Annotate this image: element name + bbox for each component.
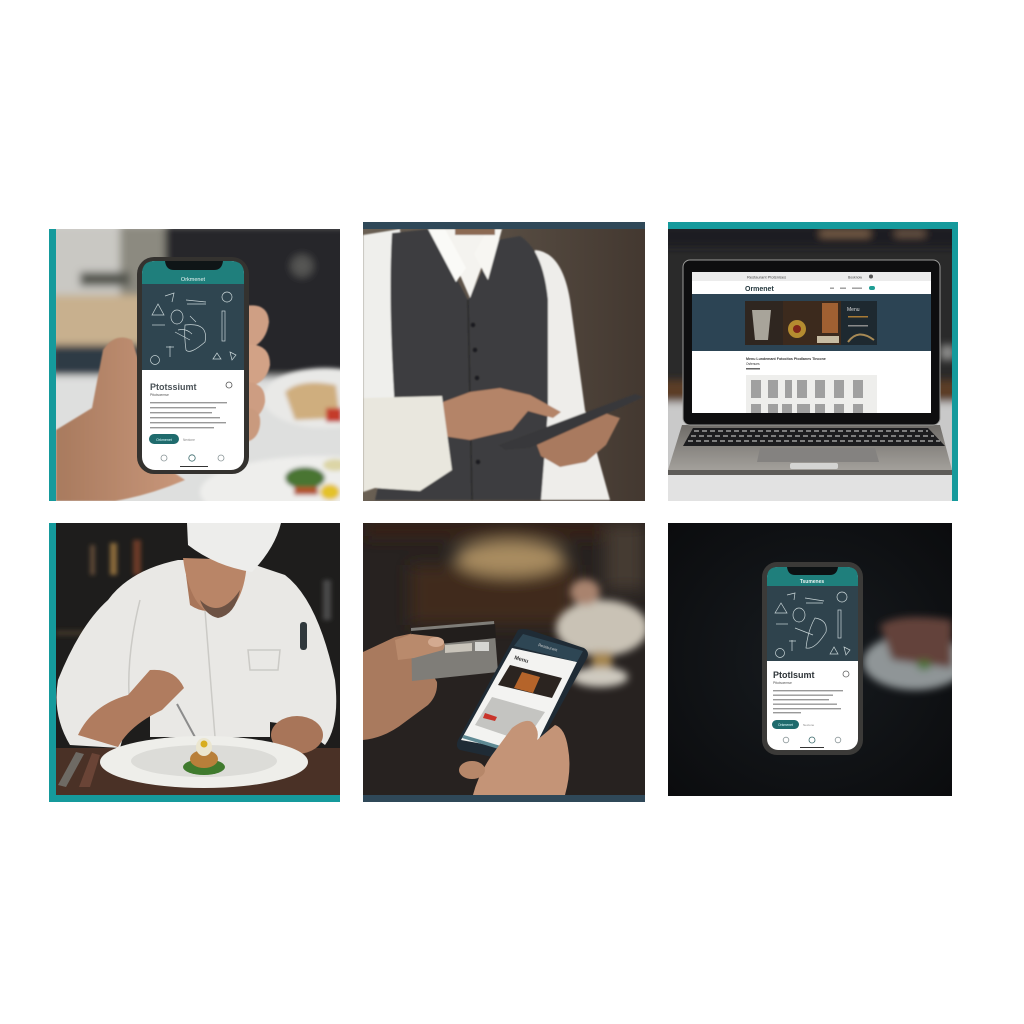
background: [363, 229, 645, 501]
illustration area: [142, 284, 244, 370]
laptop lid: [683, 260, 940, 425]
upper hand: [443, 388, 561, 440]
app header: [142, 261, 244, 284]
tweezers: [176, 704, 196, 736]
buttons: [470, 322, 476, 328]
panel: laptop with website: Restaurant Ptotsnises: [747, 274, 786, 280]
panel: laptop with website: Ormenet: [745, 286, 774, 293]
panel: laptop with website: Menu: [847, 307, 860, 313]
left sleeve: [363, 229, 402, 399]
tab bar: [161, 455, 224, 461]
panel: card and phone payment: Restaurant: [538, 642, 559, 653]
panel: laptop with website: [660, 222, 960, 512]
panel: card and phone payment: [363, 523, 648, 802]
tablet: [534, 394, 642, 446]
chef hat: [187, 523, 281, 572]
cutlery: [58, 752, 84, 787]
accent bar: top slate: [363, 222, 645, 229]
plate: [100, 736, 308, 788]
table: [56, 748, 340, 795]
panel: phone held in hand: [49, 229, 340, 501]
panel: chef plating: [49, 523, 340, 802]
background: [668, 229, 952, 387]
app content: Ptotssiumt: [150, 382, 197, 392]
phone: [457, 629, 588, 763]
credit card: [411, 621, 498, 681]
lower hand: [535, 412, 620, 467]
menu table: Menu Lundemant Fotocitos Ptodlanes Tincone: [746, 357, 826, 361]
phone mockup: Pttotsoemse: [773, 681, 792, 685]
phone mockup: Orkmenet: [181, 277, 206, 283]
panel: laptop with website: Osfenues: [746, 362, 760, 366]
accent bars: top and right teal: [668, 222, 958, 501]
phone mockup: Orkmenet: [778, 723, 793, 727]
hero image: [745, 301, 783, 345]
photo grid: [49, 222, 958, 802]
phone mockup: Pttotsoemse: [150, 393, 169, 397]
chef jacket: [56, 560, 336, 748]
laptop base: [668, 425, 952, 472]
blurred plate with food: [863, 617, 967, 690]
sleeve cuff: [363, 396, 452, 492]
background: [668, 523, 952, 796]
vest: [375, 229, 548, 500]
phone mockup: [762, 562, 863, 755]
background: [363, 523, 645, 795]
blurred plates and food: [200, 364, 340, 501]
hands: [78, 670, 184, 747]
phone mockup: [137, 257, 249, 474]
right sleeve: [530, 250, 610, 500]
app content: Ptotlsumt: [773, 670, 815, 680]
background: [56, 523, 340, 748]
neck: [455, 229, 495, 235]
restaurant background: [56, 229, 340, 501]
illustration area: [767, 586, 858, 661]
left hand palm and fingers: [363, 633, 437, 740]
hand: [56, 305, 270, 501]
app header: [767, 567, 858, 586]
plated food: [183, 761, 225, 775]
neck and face: [186, 575, 206, 611]
table surface: [668, 475, 952, 501]
website screen: [692, 272, 931, 413]
panel: phone on dark background: [668, 523, 967, 796]
accent bars: left and bottom teal: [49, 523, 340, 802]
right hand: [473, 721, 569, 795]
panel: waiter with tablet: [363, 222, 645, 501]
phone mockup: Orkmenet: [156, 438, 172, 442]
accent bar: bottom slate: [363, 795, 645, 802]
panel: card and phone payment: Menu: [513, 655, 529, 665]
keyboard: [683, 428, 945, 446]
phone mockup: Tsumenes: [800, 579, 824, 585]
trackpad and notch: [757, 450, 879, 462]
panel: laptop with website: Booknow: [848, 276, 862, 280]
collar and shirt front: [444, 229, 486, 298]
phone mockup: Nextone: [803, 723, 815, 727]
phone hero and menu: [498, 665, 562, 698]
thumb: [395, 634, 445, 660]
tab bar: [783, 737, 841, 743]
phone mockup: Nextone: [183, 438, 195, 442]
accent bar: left teal: [49, 229, 56, 501]
